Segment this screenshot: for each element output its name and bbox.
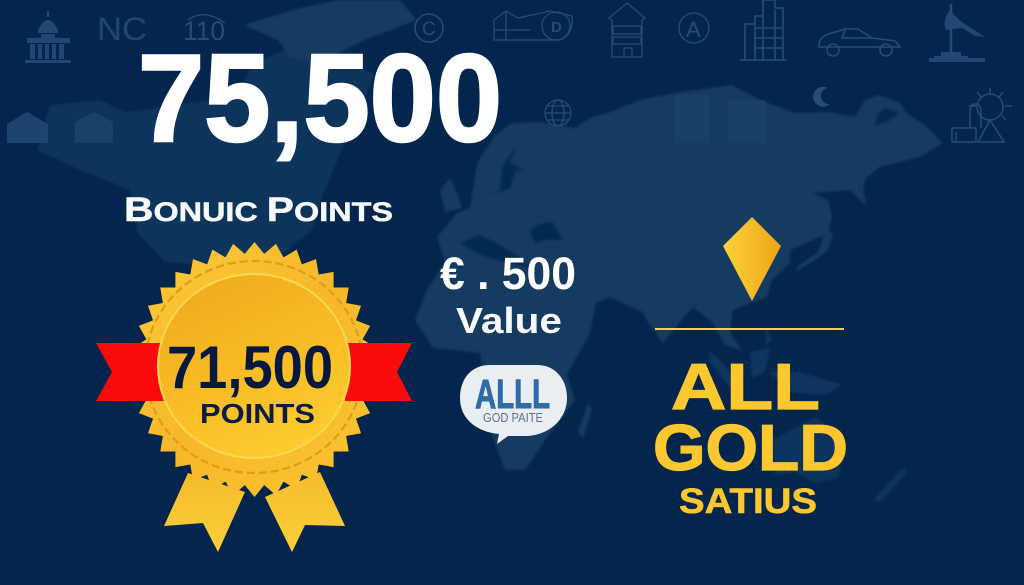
subheading: bonus points: BONUIC POINTS: [124, 191, 393, 229]
value amount: € . 500: [440, 248, 576, 299]
building: tower on map: [675, 95, 709, 143]
faint map buildings: [675, 95, 766, 143]
gold rosette badge: [96, 242, 412, 552]
map: japan: [795, 228, 833, 272]
icon: flag monument: [929, 4, 985, 62]
icon: car: [819, 29, 900, 56]
icon: circled c: C: [422, 19, 436, 40]
badge: inner medallion: [158, 274, 350, 458]
map: british isles: [440, 178, 462, 212]
icon: globe: [545, 100, 571, 126]
icon: gold kite diamond: [723, 217, 781, 301]
icon: building with d badge: [494, 11, 572, 40]
badge: left ribbon: [96, 343, 165, 401]
icon: crescent moon: [813, 87, 830, 107]
speech bubble: [460, 365, 567, 444]
bubble title: ALLL: [475, 371, 550, 417]
icon: circled a: [679, 13, 709, 43]
icon: circled c: [415, 14, 443, 42]
icon: 110 lettering: 110: [183, 16, 225, 46]
status subtitle: SATIUS: [679, 482, 817, 521]
map: eurasia and africa: [415, 85, 943, 470]
map: sakhalin: [826, 200, 832, 232]
bubble shape: [460, 365, 567, 444]
badge: right ribbon: [345, 343, 412, 401]
map: madagascar: [578, 403, 592, 438]
icon: apartment house: [609, 3, 645, 57]
badge: starburst seal: [132, 242, 378, 497]
map: new zealand: [873, 468, 907, 503]
sea: baltic: [490, 146, 525, 195]
divider line: [655, 328, 844, 330]
map: southeast asia islands: [708, 325, 842, 395]
badge: right tail: [265, 472, 345, 552]
building: hall on map: [728, 100, 766, 143]
world map: [37, 0, 943, 503]
icon: skyscraper: [740, 0, 787, 60]
status title: all: ALL: [671, 350, 820, 423]
icon: classical building left: [7, 112, 48, 143]
icon: classical building faint: [75, 112, 113, 143]
icon: building with d badge: D: [551, 19, 562, 36]
bubble caption: GOD PAITE: [483, 411, 543, 425]
sea: arctic bay: [875, 108, 900, 126]
sea: mediterranean: [460, 235, 530, 268]
map: inland seas: [460, 108, 900, 268]
headline number: 75,500: [138, 30, 502, 168]
icon: domed capitol: [25, 11, 71, 63]
icon: NC lettering: NC: [97, 11, 147, 47]
value label: Value: [456, 300, 562, 341]
badge: points label: POINTS: [200, 398, 315, 429]
sea: black sea: [530, 222, 563, 243]
map: australia: [773, 417, 843, 483]
map: greenland: [243, 0, 417, 62]
icon: sun and desk: [952, 88, 1012, 142]
badge: left tail: [164, 473, 245, 552]
map: north america: [37, 50, 375, 266]
badge: points number: 71,500: [167, 334, 333, 401]
background line icons: [7, 0, 1012, 143]
icon: circled a: A: [686, 17, 701, 42]
status title: gold: GOLD: [653, 411, 848, 484]
